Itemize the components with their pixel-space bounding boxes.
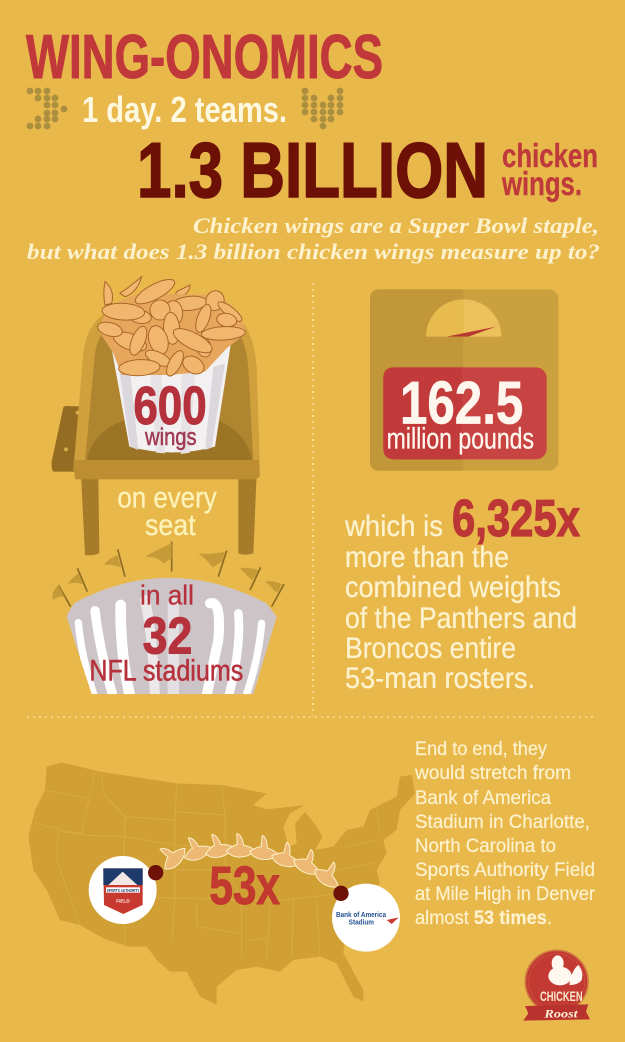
bucket label: 600 [133, 377, 207, 436]
divider dots [312, 283, 314, 716]
distance text: would stretch from [414, 763, 571, 784]
weight comparison text: 53-man rosters. [345, 662, 535, 695]
panel: map [28, 762, 415, 1005]
icon: Denver stadium badge [89, 856, 157, 924]
distance text: Sports Authority Field [415, 860, 595, 881]
distance text: Bank of America [415, 788, 551, 809]
headline number: 1.3 BILLION [137, 126, 488, 214]
weight label box [383, 367, 547, 459]
on every seat text: seat [145, 509, 196, 542]
distance text: End to end, they [415, 739, 547, 760]
icon: Charlotte stadium badge: Stadium [349, 917, 374, 926]
on every seat text [117, 481, 217, 542]
distance text: North Carolina to [415, 836, 556, 857]
ribbon [523, 1004, 590, 1021]
icon: bucket [111, 345, 231, 454]
title: WING-ONOMICS [26, 23, 383, 92]
intro text: Chicken wings are a Super Bowl staple, [193, 213, 599, 238]
weight comparison text [344, 490, 580, 695]
stadium label: NFL stadiums [89, 655, 243, 688]
distance text: at Mile High in Denver [415, 884, 596, 905]
Charlotte marker [333, 886, 349, 901]
weight comparison text: more than the [345, 541, 509, 574]
icon: Denver stadium badge: SPORTS AUTHORITY [107, 888, 140, 894]
headline unit: wings. [501, 165, 582, 202]
comparison number: 6,325x [452, 490, 580, 548]
weight label box: million pounds [387, 422, 534, 455]
icon: Charlotte stadium badge [332, 884, 400, 952]
icon: chicken [548, 955, 582, 985]
icon: dotted down arrow [302, 88, 343, 129]
stadium label: 32 [143, 606, 192, 664]
headline unit: chicken [502, 137, 598, 174]
distance text: Stadium in Charlotte, [415, 812, 590, 833]
icon: Charlotte stadium badge: Bank of America [336, 910, 387, 919]
multiplier: 53x [209, 857, 280, 916]
icon: dotted right arrow [27, 88, 67, 129]
headline unit [501, 137, 598, 202]
intro text [27, 213, 600, 264]
logo: Chicken Roost [523, 950, 590, 1021]
icon: stadium with flags [52, 542, 284, 703]
weight label box: 162.5 [400, 369, 523, 436]
scale body [370, 289, 558, 471]
weight comparison text: Broncos entire [345, 632, 516, 665]
logo: Chicken Roost: CHICKEN [540, 988, 583, 1004]
US map [28, 762, 415, 1005]
logo: Chicken Roost: Roost [543, 1006, 578, 1020]
icon: stadium seat [52, 305, 260, 555]
subtitle: 1 day. 2 teams. [82, 89, 287, 130]
bucket label: wings [144, 424, 197, 451]
panel: scale [370, 289, 558, 471]
weight comparison text: of the Panthers and [345, 602, 577, 635]
icon: chicken wings pile [96, 275, 246, 379]
bucket label [133, 377, 207, 451]
panel: seat and bucket [52, 275, 284, 703]
icon: chain of wings [154, 832, 348, 892]
Denver marker [148, 865, 163, 880]
distance text [414, 739, 596, 929]
distance text: almost 53 times. [415, 908, 552, 929]
intro text: but what does 1.3 billion chicken wings measure up to? [27, 239, 600, 264]
icon: dial and needle [426, 299, 501, 337]
weight comparison text: which is [344, 510, 443, 543]
stadium label [89, 579, 243, 688]
weight comparison text: combined weights [345, 571, 561, 604]
icon: Denver stadium badge: FIELD [116, 898, 130, 903]
on every seat text: on every [117, 481, 217, 514]
stadium label: in all [140, 579, 194, 610]
